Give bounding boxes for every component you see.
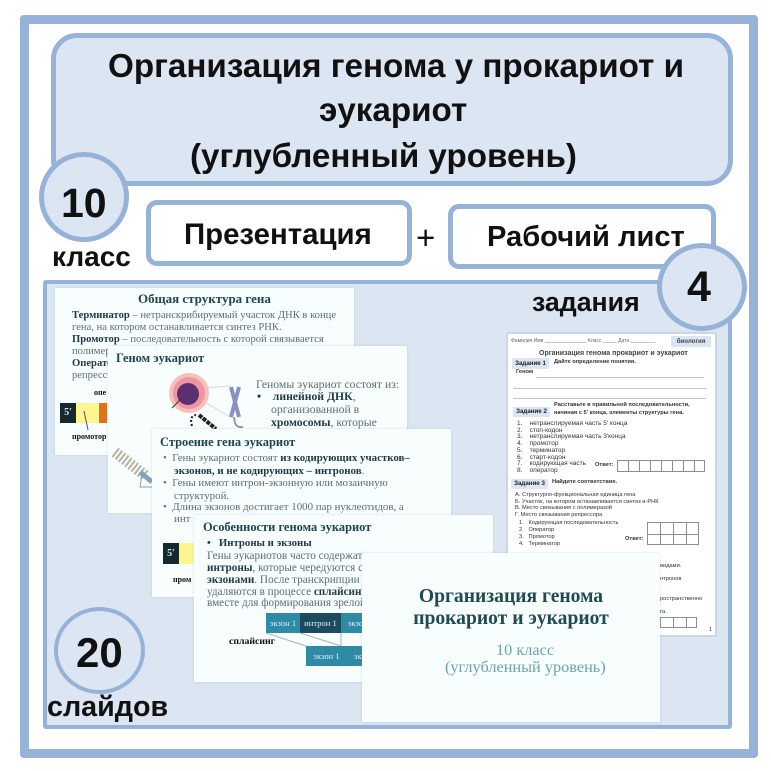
slide 2 text	[256, 378, 399, 429]
task 2: Расставьте в правильной последовательности,	[554, 402, 690, 408]
slide 4 text: экзонами. После транскрипции мРНК интроны	[207, 574, 436, 586]
task 3: Задание 3	[514, 480, 545, 487]
title slide heading: Организация генома	[419, 586, 603, 607]
splicing diagram: экзон 2	[348, 618, 374, 628]
slide 3 text: инт	[174, 513, 190, 525]
splicing diagram: сплайсинг	[229, 636, 275, 647]
slide 1 text	[72, 310, 336, 381]
slide 3 text	[163, 452, 410, 525]
slide 1 text: полимераза	[72, 346, 124, 357]
slide 2 text: организованной в	[271, 403, 359, 416]
title text: (углубленный уровень)	[190, 138, 577, 175]
task 3: 1. Кодирующая последовательность 2. Оператор 3. Промотор 4. Терминатор	[519, 520, 618, 547]
slide 2: eukaryote genome	[108, 346, 407, 513]
button: presentation	[146, 200, 412, 266]
slide 3 gene diagram: 5′	[167, 548, 175, 559]
slide 1: general gene structure	[55, 288, 354, 455]
title slide heading	[413, 586, 609, 628]
task 4 remnants: видами.	[660, 563, 681, 569]
task 3	[511, 479, 699, 547]
label: slides: слайдов	[47, 691, 168, 723]
task 3: А. Структурно-функциональная единица гена Б. Участок, на котором останавливается синтез и-РНК В. Место связывания с полимеразой Г. Место связывания репрессора	[515, 492, 659, 518]
task 2: Ответ:	[595, 462, 613, 468]
slide 3 text: структурой.	[174, 490, 229, 502]
plus sign: +	[416, 219, 435, 256]
number 10: 10	[61, 180, 107, 226]
title slide	[362, 553, 660, 722]
illustration: cell, chromosome, DNA	[112, 373, 244, 488]
title slide heading: прокариот и эукариот	[413, 608, 609, 628]
task 3: Найдите соответствие.	[552, 479, 617, 485]
slide 3 gene diagram	[163, 543, 194, 584]
slide 1 text: Оператор	[72, 358, 118, 369]
slide 4 text: • Интроны и экзоны	[207, 537, 312, 549]
slide 4 text: Гены эукариотов часто содержат некодирующие	[207, 550, 437, 562]
splicing diagram: экзон 1	[270, 618, 296, 628]
slide 3 text: • Длина экзонов достигает 1000 пар нуклеотидов, а	[163, 501, 404, 513]
badge: 4 tasks	[657, 243, 747, 331]
splicing diagram	[229, 613, 380, 666]
task 4 remnants: ространственно	[660, 596, 702, 602]
task 2: 1. нетранслируемая часть 5′ конца 2. стоп-кодон 3. нетранслируемая часть 3′конца 4. промотор 5. терминатор 6. старт-кодон 7. кодирующая часть 8. оператор	[517, 420, 627, 474]
splicing diagram: экзон 2	[354, 651, 380, 661]
slide 3 heading: Строение гена эукариот	[160, 435, 295, 449]
slide 1 text: Терминатор – нетранскрибируемый участок ДНК в конце	[72, 310, 336, 321]
title text: эукариот	[319, 92, 467, 129]
title slide subtitle: 10 класс	[496, 640, 554, 659]
slide 3 text: • Гены имеют интрон-экзонную или мозаичную	[163, 477, 388, 489]
task 4 remnants: нтронов	[660, 576, 681, 582]
slide 4 text: интроны, которые чередуются с кодирующими	[207, 562, 435, 574]
task 3: Ответ:	[625, 536, 643, 542]
slide 2 text: Геномы эукариот состоят из:	[256, 378, 399, 391]
button: worksheet	[448, 204, 716, 269]
task 1	[512, 358, 706, 399]
task 4 remnants: га.	[660, 609, 667, 615]
number 4: 4	[687, 263, 711, 311]
gene diagram: опе	[94, 388, 106, 397]
title text: Организация генома у прокариот и	[108, 48, 684, 85]
task 2	[513, 402, 705, 474]
gene diagram: промотор	[72, 432, 106, 441]
label: presentation: Презентация	[184, 218, 372, 251]
splicing diagram: экзон 1	[313, 651, 340, 661]
number 20: 20	[76, 629, 123, 676]
worksheet title: Организация генома прокариот и эукариот	[539, 350, 688, 357]
label: worksheet: Рабочий лист	[487, 221, 685, 253]
slide 2 text: • линейной ДНК,	[257, 390, 356, 403]
gene diagram: 5′	[64, 407, 72, 418]
subject tag	[671, 336, 711, 347]
task 1: Геном	[516, 369, 533, 375]
slide 4 heading: Особенности генома эукариот	[203, 520, 371, 534]
title slide subtitle: (углубленный уровень)	[445, 657, 606, 676]
task 4 remnants	[660, 563, 712, 633]
title panel	[51, 33, 733, 186]
worksheet preview	[506, 332, 717, 637]
worksheet header: Фамилия Имя _______________ Класс _____ Дата _________	[511, 338, 656, 344]
title slide subtitle	[445, 640, 606, 676]
task 2: начиная с 5′ конца, элементы структуры гена.	[554, 410, 684, 416]
slide 3 gene diagram: пром	[173, 575, 191, 584]
slide 2 heading: Геном эукариот	[116, 351, 204, 365]
task 1: Дайте определение понятия.	[554, 359, 636, 365]
badge: grade 10	[39, 152, 129, 242]
slide 4 text	[207, 537, 437, 609]
slide 3 text: экзонов, и не кодирующих – интронов.	[174, 465, 364, 477]
task 1: Задание 1	[515, 360, 546, 367]
slide 1 text: гена, на котором останавливается синтез РНК.	[72, 322, 282, 333]
slide 1 heading: Общая структура гена	[138, 291, 271, 306]
badge: 20 slides	[54, 607, 145, 694]
slide 3 text: • Гены эукариот состоят из кодирующих участков–	[163, 452, 410, 464]
slide 4 text: вместе для формирования зрелой мРНК	[207, 597, 398, 609]
slide 1 text: репрессор	[72, 370, 118, 381]
gene diagram	[60, 388, 107, 441]
subject tag: биология	[677, 338, 705, 345]
title text	[108, 48, 684, 175]
slide 3: eukaryote gene structure	[152, 429, 451, 597]
label: class: класс	[52, 241, 131, 272]
slide 1 text: Промотор – последовательность с которой связывается	[72, 334, 324, 345]
label: tasks: задания	[532, 287, 640, 317]
splicing diagram: интрон 1	[304, 618, 337, 628]
task 4 remnants: 1	[709, 627, 712, 633]
worksheet header	[511, 336, 711, 347]
task 2: Задание 2	[516, 408, 547, 415]
lower panel	[43, 280, 732, 729]
slide 4 text: удаляются в процессе сплайсинга, а экзоны	[207, 586, 419, 598]
slide 4: eukaryote genome features	[194, 515, 493, 682]
slide 2 text: хромосомы, которые	[271, 416, 377, 429]
